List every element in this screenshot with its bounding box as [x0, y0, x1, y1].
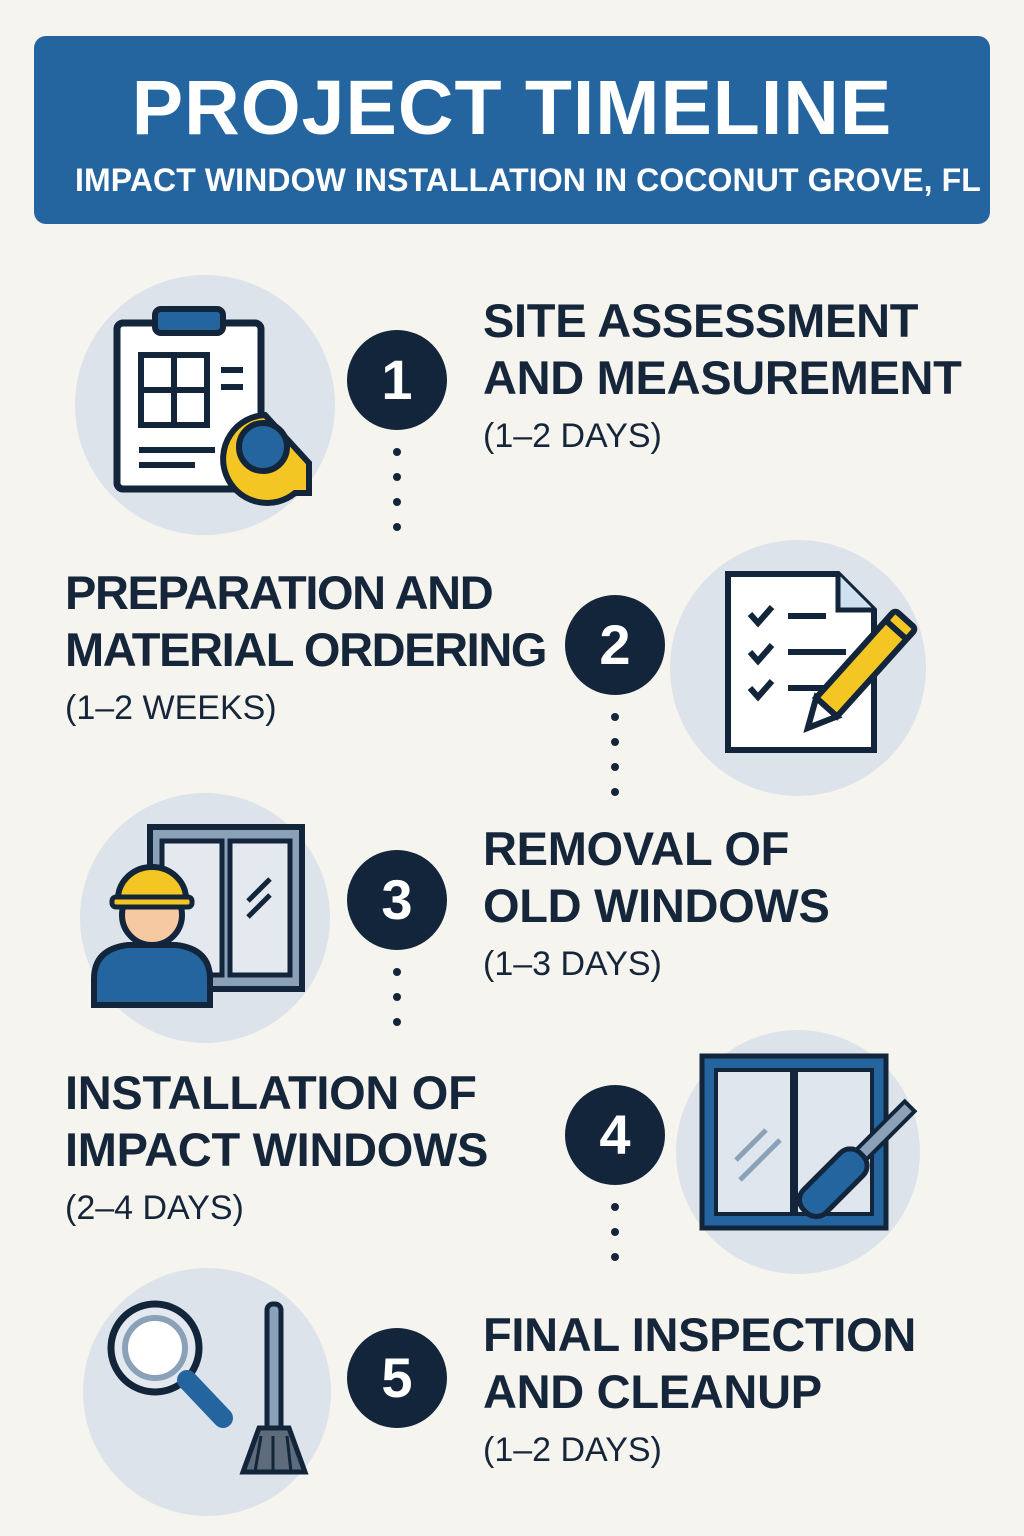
title: PROJECT TIMELINE [132, 65, 892, 151]
icon: magnifier and broom [83, 1268, 331, 1516]
step 1 text: (1–2 DAYS) [483, 417, 662, 455]
step 5 text: (1–2 DAYS) [483, 1431, 662, 1469]
icon: worker with window [80, 793, 330, 1043]
step 3 number: 3 [381, 868, 413, 931]
step 3 text: (1–3 DAYS) [483, 945, 662, 983]
step 4 text: IMPACT WINDOWS [65, 1123, 488, 1176]
header banner [34, 36, 990, 224]
step 4 text: (2–4 DAYS) [65, 1189, 244, 1227]
step 3 text: OLD WINDOWS [483, 879, 830, 932]
icon: clipboard with tape measure [75, 275, 335, 535]
icon: checklist and pencil [670, 540, 926, 796]
icon: window and screwdriver [676, 1030, 920, 1274]
dots 1 [393, 448, 401, 531]
step 2 number [565, 595, 665, 695]
step 2 text: PREPARATION AND [65, 566, 492, 619]
step 4 number [565, 1085, 665, 1185]
step 4 text [65, 1066, 488, 1227]
dots 4 [611, 1203, 619, 1261]
step 2 text: MATERIAL ORDERING [65, 623, 546, 676]
step 3 text [483, 822, 830, 983]
step 1 text: SITE ASSESSMENT [483, 294, 918, 347]
step 2 text: (1–2 WEEKS) [65, 689, 277, 727]
step 4 number: 4 [599, 1103, 631, 1166]
step 2 number: 2 [599, 613, 631, 676]
dots 2 [611, 713, 619, 796]
subtitle: IMPACT WINDOW INSTALLATION IN COCONUT GROVE, FL [75, 162, 981, 198]
dots 3 [393, 968, 401, 1026]
step 1 number: 1 [381, 348, 413, 411]
step 5 text [483, 1308, 916, 1469]
step 5 number: 5 [381, 1346, 413, 1409]
step 1 text [483, 294, 962, 455]
step 3 text: REMOVAL OF [483, 822, 789, 875]
step 2 text [65, 566, 546, 727]
step 1 text: AND MEASUREMENT [483, 351, 962, 404]
step 1 number [347, 330, 447, 430]
step 4 text: INSTALLATION OF [65, 1066, 476, 1119]
step 3 number [347, 850, 447, 950]
step 5 number [347, 1328, 447, 1428]
step 5 text: FINAL INSPECTION [483, 1308, 916, 1361]
step 5 text: AND CLEANUP [483, 1365, 822, 1418]
